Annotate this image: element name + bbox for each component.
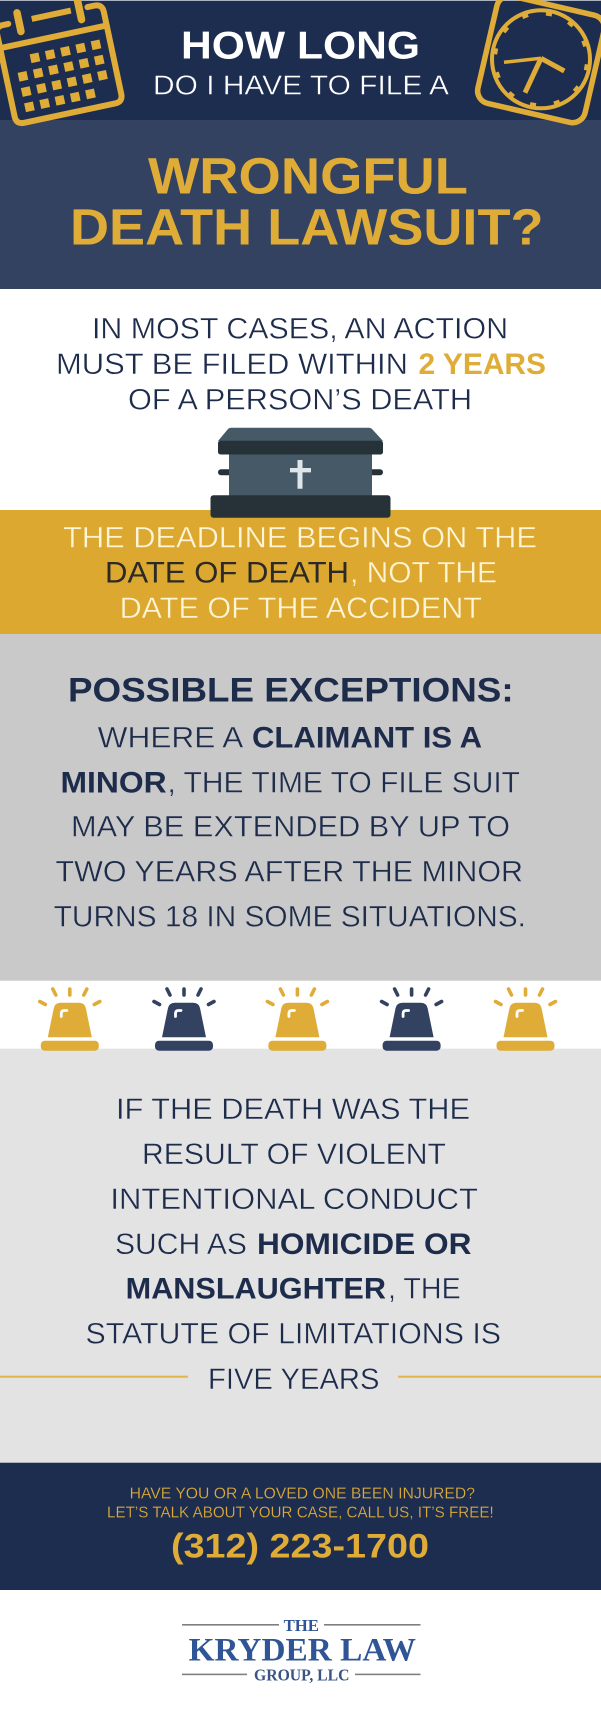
text block: call to action [107, 1485, 494, 1521]
text block: two year deadline: 2 YEARS [418, 348, 546, 381]
panel: possible exceptions background [0, 634, 601, 981]
text block: violent conduct statute: MANSLAUGHTER [126, 1273, 386, 1306]
text block: violent conduct statute: IF THE DEATH WAS THE [116, 1093, 470, 1126]
icon: coffin [210, 428, 390, 518]
text block: violent conduct statute: HOMICIDE OR [257, 1228, 472, 1261]
text block: violent conduct statute: FIVE YEARS [208, 1363, 380, 1396]
text block: violent conduct statute: SUCH AS [115, 1228, 247, 1261]
subtitle: do I have to file a: DO I HAVE TO FILE A [153, 70, 450, 101]
text block: minor claimant exception: WHERE A [98, 721, 243, 754]
text block: violent conduct statute [86, 1093, 501, 1396]
logo: the kryder law group [182, 1616, 420, 1685]
text block: violent conduct statute: INTENTIONAL CONDUCT [110, 1183, 478, 1216]
icon: navy alarm light 4 [382, 989, 442, 1051]
text block: two year deadline: IN MOST CASES, AN ACTION [92, 313, 508, 346]
text block: minor claimant exception [54, 721, 526, 934]
icon: calendar [0, 0, 123, 124]
icon: clock [475, 0, 601, 125]
text block: minor claimant exception: MAY BE EXTENDED BY UP TO [71, 811, 510, 844]
text block: minor claimant exception: , THE TIME TO FILE SUIT [168, 766, 520, 799]
text block: deadline begins [63, 521, 537, 625]
text block: deadline begins: , NOT THE [350, 557, 497, 590]
logo: the kryder law group: KRYDER LAW [189, 1632, 416, 1668]
title: how long: HOW LONG [181, 25, 420, 68]
text block: deadline begins: DATE OF THE ACCIDENT [120, 592, 482, 625]
icon: gold alarm light 1 [40, 989, 100, 1051]
text block: violent conduct statute: RESULT OF VIOLENT [142, 1138, 446, 1171]
panel: header top band [0, 0, 601, 120]
text block: two year deadline: MUST BE FILED WITHIN [56, 348, 408, 381]
text block: two year deadline: OF A PERSON’S DEATH [128, 383, 472, 416]
text block: two year deadline [56, 313, 546, 416]
icon: gold alarm light 5 [496, 989, 556, 1051]
text block: minor claimant exception: MINOR [60, 766, 167, 799]
panel: header title band [0, 120, 601, 289]
logo: the kryder law group: THE [284, 1616, 319, 1635]
text block: deadline begins: DATE OF DEATH [105, 557, 349, 590]
text block: call to action: HAVE YOU OR A LOVED ONE BEEN INJURED? [130, 1485, 475, 1502]
panel: call to action footer [0, 1463, 601, 1590]
text block: minor claimant exception: CLAIMANT IS A [252, 721, 482, 754]
text block: minor claimant exception: TWO YEARS AFTER THE MINOR [56, 856, 523, 889]
heading: wrongful death lawsuit: WRONGFUL [148, 147, 468, 204]
logo: the kryder law group: GROUP, LLC [254, 1666, 350, 1685]
panel: violent conduct background [0, 1049, 601, 1463]
heading: wrongful death lawsuit: DEATH LAWSUIT? [70, 198, 544, 255]
text block: minor claimant exception: TURNS 18 IN SOME SITUATIONS. [54, 901, 526, 934]
text block: violent conduct statute: , THE [388, 1273, 461, 1306]
heading: possible exceptions: POSSIBLE EXCEPTIONS: [68, 671, 514, 709]
icon: gold alarm light 3 [267, 989, 327, 1051]
panel: gold deadline band [0, 510, 601, 634]
heading: wrongful death lawsuit [70, 147, 544, 255]
text block: call to action: LET’S TALK ABOUT YOUR CASE, CALL US, IT’S FREE! [107, 1504, 494, 1521]
text block: violent conduct statute: STATUTE OF LIMITATIONS IS [86, 1318, 501, 1351]
phone number: (312) 223-1700 [171, 1528, 429, 1566]
icon: navy alarm light 2 [154, 989, 214, 1051]
text block: deadline begins: THE DEADLINE BEGINS ON THE [63, 521, 537, 554]
